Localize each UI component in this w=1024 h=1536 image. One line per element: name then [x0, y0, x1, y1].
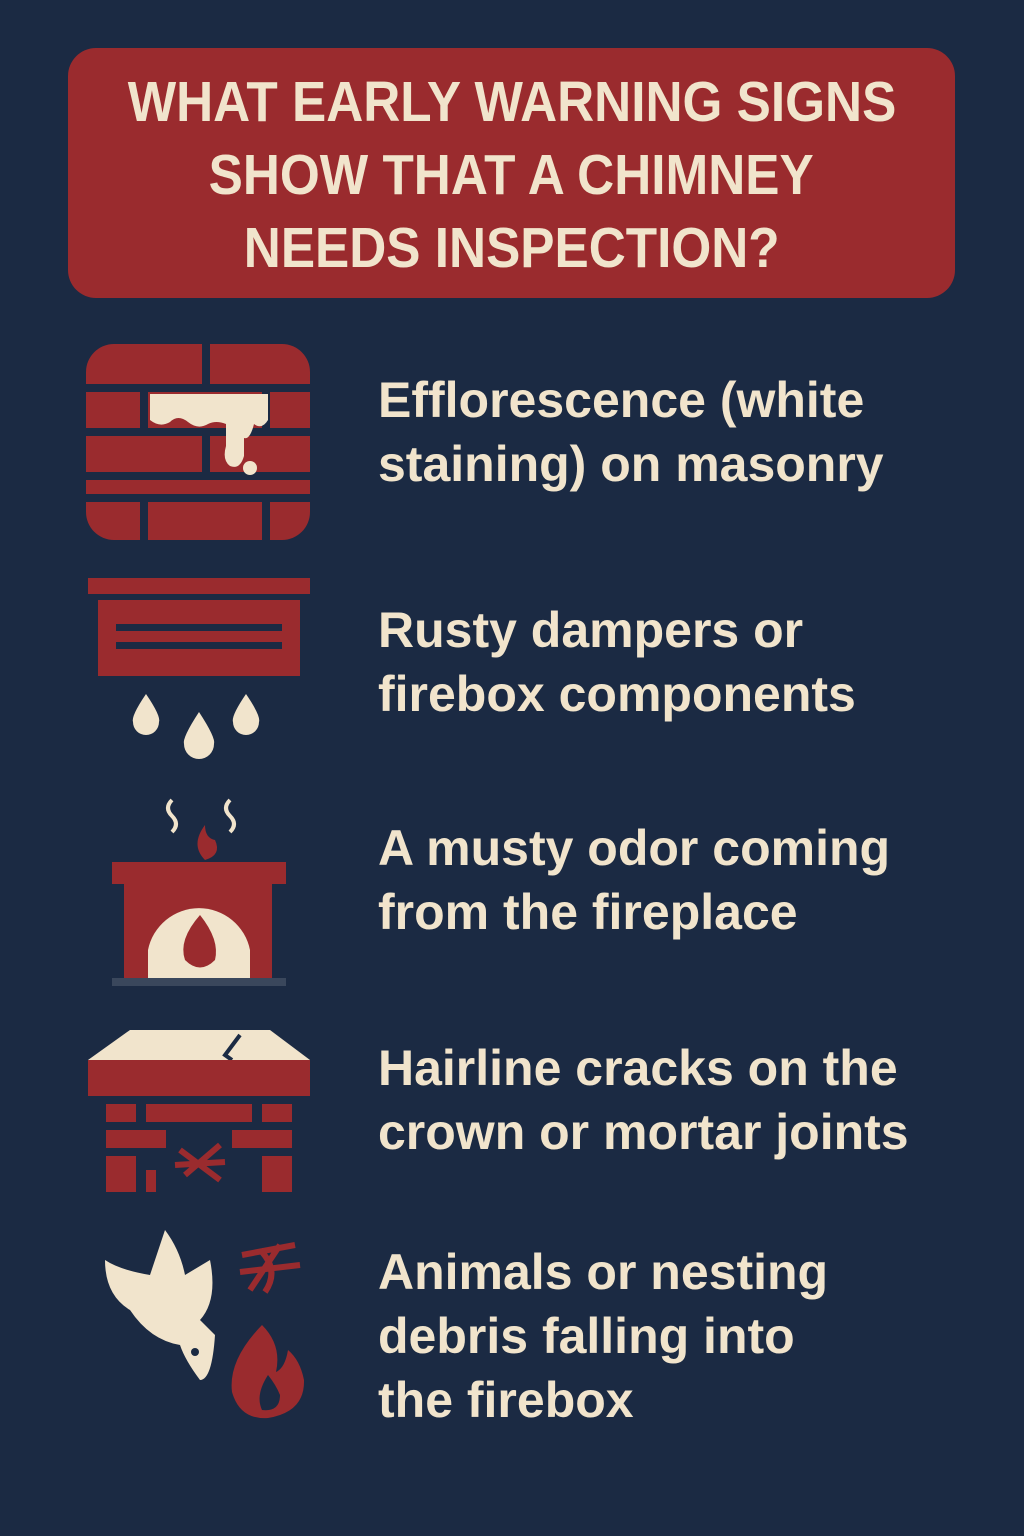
- icon: cracked crown: [88, 1030, 310, 1192]
- text: rusty dampers: Rusty dampers or: [378, 602, 803, 658]
- text: rusty dampers: firebox components: [378, 666, 856, 722]
- icon: fireplace: [112, 800, 286, 986]
- text: efflorescence: [378, 372, 884, 492]
- text: animals: Animals or nesting: [378, 1244, 828, 1300]
- text: rusty dampers: [378, 602, 856, 722]
- icon: damper with drips: [88, 578, 310, 759]
- text: musty odor: [378, 820, 890, 940]
- text: hairline cracks: crown or mortar joints: [378, 1104, 909, 1160]
- title: WHAT EARLY WARNING SIGNS: [127, 70, 896, 134]
- text: efflorescence: staining) on masonry: [378, 436, 884, 492]
- icon: brick wall with white stain: [86, 344, 310, 540]
- title: SHOW THAT A CHIMNEY: [209, 143, 814, 207]
- text: animals: [378, 1244, 828, 1428]
- title: NEEDS INSPECTION?: [244, 216, 779, 280]
- text: animals: the firebox: [378, 1372, 634, 1428]
- icon: falling bird and debris: [105, 1230, 304, 1418]
- text: musty odor: from the fireplace: [378, 884, 798, 940]
- text: animals: debris falling into: [378, 1308, 795, 1364]
- title: [68, 48, 955, 298]
- text: hairline cracks: Hairline cracks on the: [378, 1040, 898, 1096]
- text: musty odor: A musty odor coming: [378, 820, 890, 876]
- text: efflorescence: Efflorescence (white: [378, 372, 864, 428]
- text: hairline cracks: [378, 1040, 909, 1160]
